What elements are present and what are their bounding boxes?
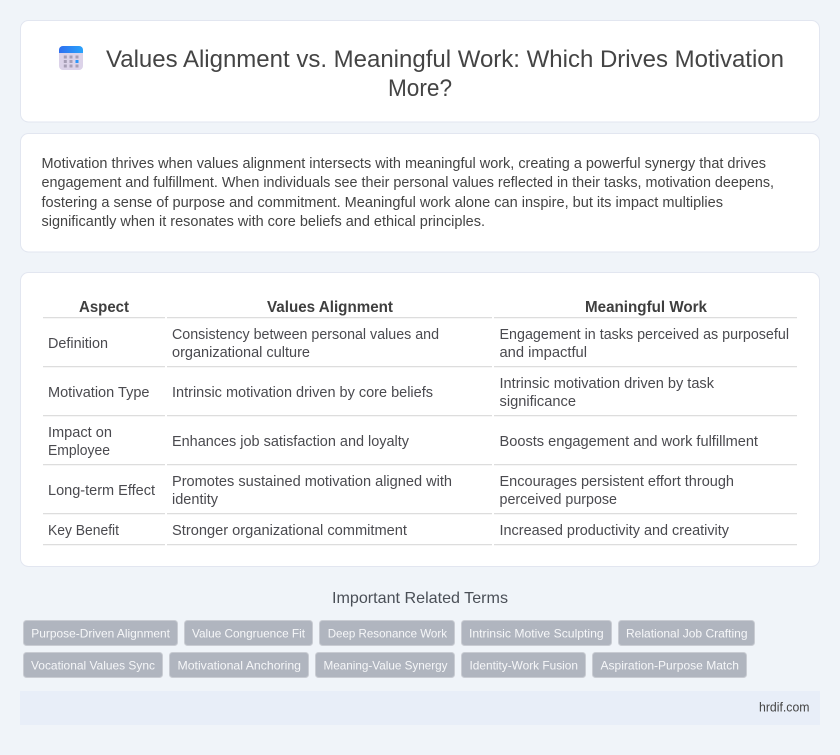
row: Impact on Employee: Enhances job satisfaction and loyalty (172, 434, 410, 450)
row: Long-term Effect: identity (172, 492, 219, 508)
tag (170, 652, 308, 678)
row: Key Benefit: Key Benefit (48, 523, 119, 539)
tag (462, 620, 612, 646)
tag: Vocational Values Sync (31, 658, 155, 672)
row: Definition: Consistency between personal values and (172, 327, 439, 343)
row: Definition: Definition (48, 336, 108, 352)
footer bar (20, 691, 820, 725)
title: More? (388, 75, 452, 102)
tag: Purpose-Driven Alignment (31, 626, 171, 640)
row: Key Benefit (48, 523, 730, 539)
row: Motivation Type: Intrinsic motivation driven by task (500, 376, 715, 392)
title (106, 46, 784, 102)
row: Impact on Employee: Boosts engagement and work fulfillment (500, 434, 758, 450)
row: Motivation Type (48, 376, 715, 410)
row: Long-term Effect (48, 474, 734, 508)
tag (184, 620, 312, 646)
tag (316, 652, 454, 678)
tag (618, 620, 754, 646)
row: Definition: Engagement in tasks perceived as purposeful (500, 327, 789, 343)
table header row: Aspect (79, 299, 130, 316)
row: Definition: and impactful (500, 345, 587, 361)
tag: Deep Resonance Work (328, 626, 448, 640)
text block: introduction: significantly when it resonates with core beliefs and ethical principles. (42, 214, 485, 230)
row: Impact on Employee: Employee (48, 443, 110, 459)
heading: important related terms: Important Related Terms (332, 590, 508, 607)
tag: Aspiration-Purpose Match (600, 658, 739, 672)
table header row: Values Alignment (267, 299, 394, 316)
icon: calendar (59, 46, 83, 70)
row: Key Benefit: Stronger organizational commitment (172, 523, 407, 539)
footer source text: hrdif.com (759, 700, 810, 714)
row: Impact on Employee: Impact on (48, 425, 112, 441)
tags: related terms (24, 620, 754, 678)
tag: Motivational Anchoring (178, 658, 301, 672)
row: Long-term Effect: perceived purpose (500, 492, 617, 508)
row: Definition: organizational culture (172, 345, 310, 361)
tag (320, 620, 454, 646)
row: Motivation Type: Intrinsic motivation driven by core beliefs (172, 385, 433, 401)
row: Definition (48, 327, 789, 361)
text block: introduction: Motivation thrives when values alignment intersects with meaningful work, creating a powerful synergy that drives (42, 156, 766, 172)
text block: introduction (42, 156, 774, 230)
tag: Meaning-Value Synergy (324, 658, 448, 672)
row: Long-term Effect: Encourages persistent effort through (500, 474, 734, 490)
tag (24, 620, 178, 646)
row: Long-term Effect: Long-term Effect (48, 483, 155, 499)
row: Long-term Effect: Promotes sustained motivation aligned with (172, 474, 452, 490)
text block: introduction: engagement and fulfillment. When individuals see their personal values reflected in their tasks, motivation deepens, (42, 175, 774, 191)
panel: introduction paragraph (20, 134, 820, 252)
tag (592, 652, 746, 678)
row: Impact on Employee (48, 425, 758, 459)
tag (24, 652, 162, 678)
tag: Value Congruence Fit (192, 626, 306, 640)
panel: comparison table (20, 272, 820, 566)
row: Motivation Type: significance (500, 394, 576, 410)
panel: title card (20, 20, 820, 122)
row: Motivation Type: Motivation Type (48, 385, 150, 401)
table header row: Meaningful Work (585, 299, 707, 316)
tag: Relational Job Crafting (626, 626, 748, 640)
table header row (79, 299, 707, 316)
tag: Intrinsic Motive Sculpting (469, 626, 604, 640)
title: Values Alignment vs. Meaningful Work: Which Drives Motivation (106, 46, 784, 73)
tag (462, 652, 586, 678)
text block: introduction: fostering a sense of purpose and commitment. Meaningful work alone can inspire, but its impact multiplies (42, 195, 723, 211)
row: Key Benefit: Increased productivity and creativity (500, 523, 730, 539)
tag: Identity-Work Fusion (470, 658, 578, 672)
